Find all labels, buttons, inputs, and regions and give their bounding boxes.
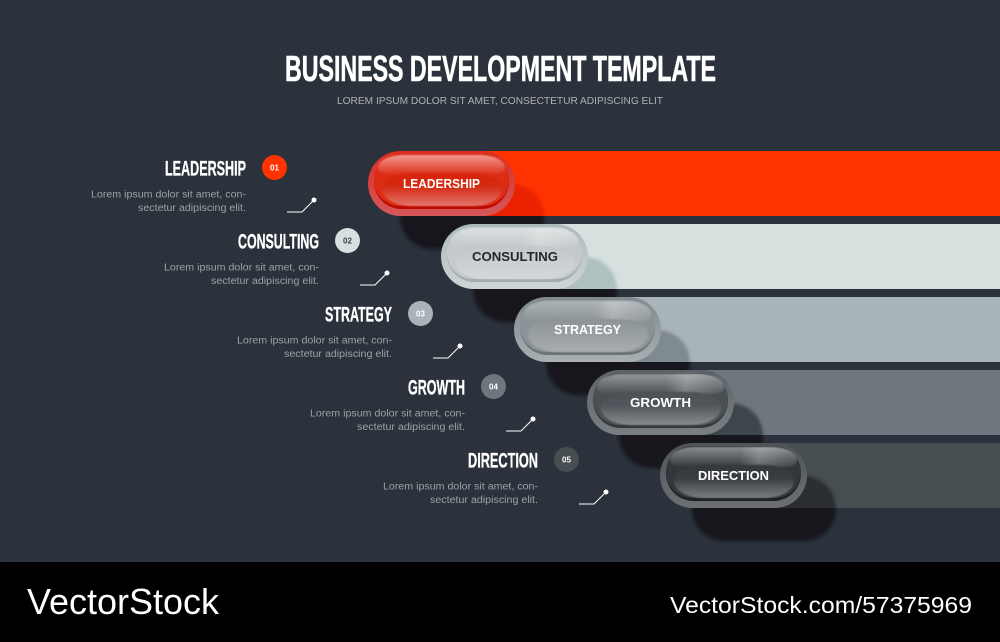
description: sectetur adipiscing elit. — [138, 203, 246, 214]
panel: direction bar row — [660, 443, 1000, 541]
text block: leadership — [91, 155, 316, 214]
description: Lorem ipsum dolor sit amet, con- — [383, 482, 538, 492]
description: sectetur adipiscing elit. — [284, 349, 392, 360]
panel: strategy bar row — [514, 297, 1000, 395]
connector icon — [506, 416, 536, 431]
connector icon — [579, 490, 608, 504]
heading: direction: DIRECTION — [468, 449, 538, 473]
description: sectetur adipiscing elit. — [211, 276, 319, 287]
bar: growth — [660, 370, 1000, 435]
number badge 05: 05 — [562, 456, 571, 464]
shadow: direction — [692, 476, 836, 541]
bar: leadership — [440, 151, 1000, 216]
bar: direction — [733, 443, 1000, 508]
pill label: growth: GROWTH — [630, 395, 691, 410]
number badge 01: 01 — [270, 164, 279, 172]
number badge 02 — [335, 228, 360, 253]
pill label: direction: DIRECTION — [698, 468, 769, 483]
number badge 01 — [262, 155, 287, 180]
number badge 03 — [408, 301, 433, 326]
pill: direction — [660, 443, 807, 508]
text block: consulting — [164, 228, 390, 287]
description: sectetur adipiscing elit. — [357, 422, 465, 433]
bar: consulting — [513, 224, 1000, 289]
connector icon — [433, 344, 462, 358]
description — [91, 190, 246, 214]
heading: consulting: CONSULTING — [238, 230, 319, 254]
pill: leadership — [368, 151, 515, 216]
number badge 03: 03 — [416, 310, 425, 318]
pill label: consulting: CONSULTING — [472, 249, 558, 264]
description — [237, 336, 392, 360]
heading: leadership: LEADERSHIP — [165, 157, 246, 181]
pill: strategy — [514, 297, 661, 362]
pill: consulting — [441, 224, 588, 289]
number badge 04 — [481, 374, 506, 399]
panel: growth bar row — [587, 370, 1000, 468]
shadow: growth — [619, 403, 763, 468]
footer band — [0, 562, 1000, 642]
pill label: leadership: LEADERSHIP — [403, 176, 480, 191]
shadow: strategy — [546, 330, 690, 395]
number badge 02: 02 — [343, 236, 352, 246]
text block: direction — [383, 447, 608, 506]
text block: strategy — [237, 301, 462, 360]
number badge 05 — [554, 447, 579, 472]
description: Lorem ipsum dolor sit amet, con- — [237, 336, 392, 346]
number badge 04: 04 — [489, 382, 498, 392]
pill: growth — [587, 370, 734, 435]
panel: consulting bar row — [441, 224, 1000, 322]
footer brand: VectorStock — [27, 581, 220, 622]
shadow: consulting — [473, 257, 617, 322]
description — [310, 408, 465, 433]
connector icon — [287, 198, 316, 212]
description — [164, 262, 319, 287]
title: BUSINESS DEVELOPMENT TEMPLATE — [285, 48, 716, 89]
subtitle: LOREM IPSUM DOLOR SIT AMET, CONSECTETUR ADIPISCING ELIT — [337, 95, 664, 107]
shadow: leadership — [400, 184, 544, 249]
pill label: strategy: STRATEGY — [554, 322, 621, 337]
text block: growth — [310, 374, 536, 433]
panel: leadership bar row — [368, 151, 1000, 249]
heading: growth: GROWTH — [408, 376, 465, 400]
description: Lorem ipsum dolor sit amet, con- — [310, 408, 465, 420]
description: Lorem ipsum dolor sit amet, con- — [164, 262, 319, 274]
footer url: VectorStock.com/57375969 — [670, 592, 972, 618]
description: Lorem ipsum dolor sit amet, con- — [91, 190, 246, 200]
description: sectetur adipiscing elit. — [430, 495, 538, 506]
description — [383, 482, 538, 506]
bar: strategy — [586, 297, 1000, 362]
connector icon — [360, 270, 390, 285]
heading: strategy: STRATEGY — [325, 303, 392, 327]
